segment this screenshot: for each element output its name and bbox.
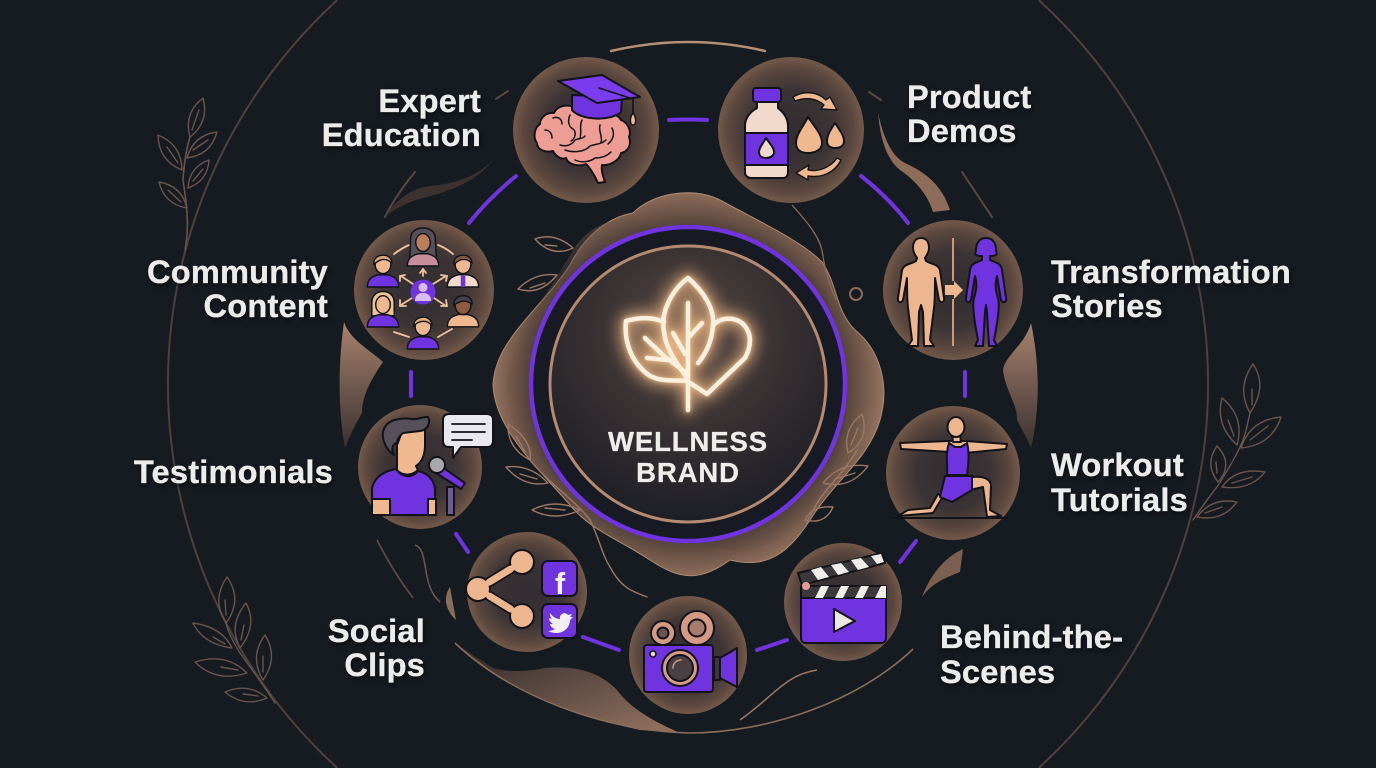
person: top woman [407, 228, 439, 266]
label: community content: Community [147, 253, 328, 290]
icon: community of people [367, 228, 479, 349]
label: transformation stories: Stories [1051, 287, 1163, 324]
node: behind-the-scenes [784, 543, 902, 661]
node: testimonials [358, 405, 493, 529]
icon: brain with graduation cap [535, 75, 640, 183]
centre title: WELLNESS [608, 426, 768, 457]
person: bottom man [407, 317, 439, 349]
icon: before and after bodies [898, 238, 1006, 346]
copper inner disc [550, 246, 826, 522]
person: lower left woman [367, 291, 399, 327]
label: expert education: Expert [378, 82, 481, 119]
facebook glyph: f [555, 566, 566, 601]
node: expert education [513, 57, 659, 203]
node: product demos [718, 57, 864, 203]
label: testimonials: Testimonials [134, 453, 333, 490]
botanical sprig: right [1193, 364, 1281, 520]
centre hub: wellness brand [531, 227, 845, 541]
icon: bottle with drops and arrows [745, 88, 844, 180]
centre title: BRAND [636, 457, 740, 488]
label: workout tutorials: Tutorials [1051, 481, 1188, 518]
person: upper right man [447, 255, 479, 287]
icon: speaker with microphone and speech bubble [372, 414, 493, 515]
purple ring [531, 227, 845, 541]
node: transformation stories [883, 220, 1023, 360]
label: social clips: Clips [344, 646, 425, 683]
connector arcs and arrows [394, 245, 453, 337]
inner decorative arcs and swooshes [340, 42, 1038, 733]
label: behind-the-scenes: Behind-the- [940, 618, 1123, 655]
icon: lunge yoga pose [893, 417, 1008, 518]
node: workout tutorials [886, 406, 1020, 540]
small leaves around the centre [506, 237, 868, 597]
thin curve and small ring [792, 205, 836, 300]
icon: video camera [644, 611, 737, 692]
label: social clips: Social [328, 612, 425, 649]
label: workout tutorials: Workout [1051, 446, 1184, 483]
swoosh: left [340, 322, 383, 448]
purple connector ring segments [411, 120, 965, 650]
node: community content [354, 220, 494, 360]
swoosh: right [1003, 323, 1038, 448]
node: camera [629, 596, 747, 714]
label: product demos: Product [907, 78, 1031, 115]
icon: glowing leaf [626, 278, 750, 410]
central organic blob [493, 193, 884, 597]
label: transformation stories: Transformation [1051, 253, 1291, 290]
label: expert education: Education [322, 116, 481, 153]
botanical sprig: lower left [193, 577, 275, 703]
outer decorative ring [168, 0, 1208, 768]
label: product demos: Demos [907, 112, 1017, 149]
hub person [410, 280, 436, 304]
label: community content: Content [204, 287, 328, 324]
person: upper left man [367, 255, 399, 287]
botanical sprig: upper left [158, 98, 217, 250]
node: social clips [466, 532, 587, 652]
label: behind-the-scenes: Scenes [940, 653, 1055, 690]
swoosh: bottom [455, 643, 680, 733]
person: lower right man [447, 296, 479, 327]
icon: clapperboard with play button [798, 553, 886, 643]
